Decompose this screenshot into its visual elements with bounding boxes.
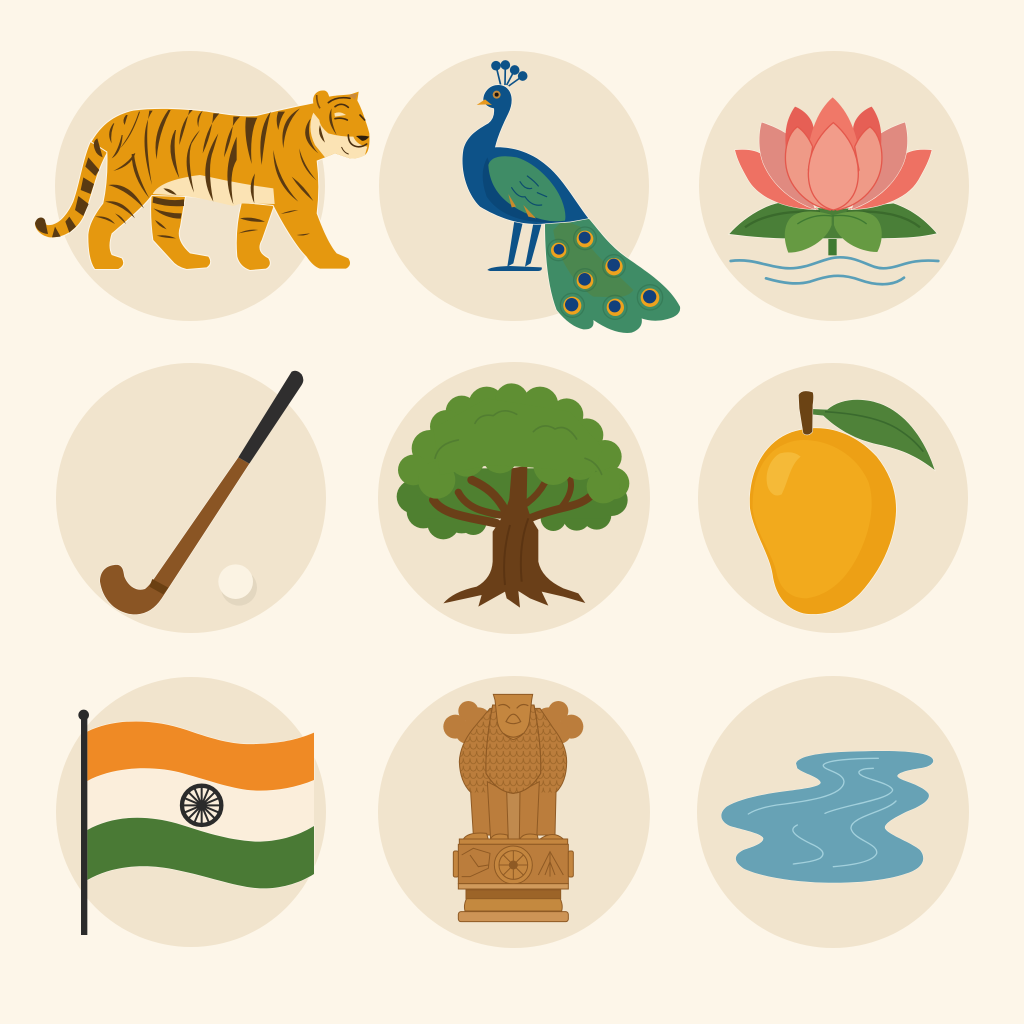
stem bbox=[828, 223, 837, 255]
icon: banyan tree bbox=[397, 383, 629, 608]
wing feathers bbox=[512, 176, 547, 205]
stripes bbox=[35, 108, 337, 238]
panel: hockey stick bbox=[56, 363, 326, 633]
backdrop circle: hockey bbox=[56, 363, 326, 633]
second petals bbox=[759, 122, 907, 209]
icon: lion capital bbox=[443, 694, 583, 922]
base bbox=[458, 884, 568, 889]
leaf bbox=[812, 400, 935, 470]
panel: lotus bbox=[699, 51, 969, 321]
icon: hockey stick bbox=[100, 371, 303, 614]
wing shadow bbox=[483, 157, 563, 222]
wing bbox=[488, 156, 565, 221]
backdrop circle: tree bbox=[378, 362, 650, 634]
backdrop circle: tiger bbox=[55, 51, 325, 321]
panel: peacock bbox=[379, 51, 680, 333]
legs and feet bbox=[487, 217, 542, 271]
abacus reliefs bbox=[462, 848, 490, 877]
icon: lotus bbox=[729, 97, 938, 284]
fruit shine bbox=[767, 452, 801, 495]
backdrop circle: emblem bbox=[378, 676, 650, 948]
backdrop circle: mango bbox=[698, 363, 968, 633]
icon: mango bbox=[750, 391, 935, 614]
branches bbox=[433, 478, 590, 523]
paws bbox=[463, 833, 563, 840]
panel: mango bbox=[698, 363, 968, 633]
green band bbox=[87, 818, 314, 888]
panel: river bbox=[697, 676, 969, 948]
cheek bbox=[310, 113, 367, 159]
icon: ball bbox=[218, 564, 257, 606]
icon: flag bbox=[78, 710, 314, 935]
water waves bbox=[731, 257, 938, 284]
ears and face bbox=[317, 95, 320, 108]
water streaks bbox=[748, 758, 896, 867]
icon: peacock bbox=[462, 61, 680, 333]
centre lion legs bbox=[487, 782, 508, 840]
water body bbox=[721, 751, 933, 883]
tail shading bbox=[553, 220, 633, 297]
centre post bbox=[507, 788, 519, 842]
side lion heads bbox=[443, 701, 583, 743]
side lions bbox=[459, 708, 567, 835]
abacus bbox=[459, 839, 568, 844]
backdrop circle: flag bbox=[56, 677, 326, 947]
beak bbox=[477, 99, 492, 105]
panel: state emblem bbox=[378, 676, 650, 948]
back petals bbox=[785, 107, 881, 157]
top petal bbox=[807, 97, 859, 153]
crest bbox=[492, 61, 527, 86]
panel: flag bbox=[56, 677, 326, 947]
icon: tiger bbox=[35, 90, 369, 270]
mango fruit bbox=[750, 428, 896, 614]
centre lion face bbox=[493, 694, 533, 740]
panel: banyan tree bbox=[378, 362, 650, 634]
inner side petals bbox=[785, 127, 882, 210]
centre petal bbox=[808, 123, 858, 210]
back leaves bbox=[729, 203, 937, 238]
dharma wheel bbox=[494, 846, 532, 884]
backdrop circle: lotus bbox=[699, 51, 969, 321]
backdrop circle: peacock bbox=[379, 51, 649, 321]
eye bbox=[493, 91, 501, 99]
body, neck and head bbox=[462, 85, 588, 224]
tail eyes bbox=[548, 227, 663, 319]
stick band bbox=[149, 579, 168, 594]
belly bbox=[153, 175, 275, 206]
fruit highlight area bbox=[753, 440, 872, 598]
front leaves bbox=[785, 211, 832, 253]
panel: tiger bbox=[35, 51, 369, 321]
front foliage bbox=[398, 383, 629, 503]
icon: river bbox=[721, 751, 933, 883]
rear foliage bbox=[397, 468, 628, 539]
saffron band bbox=[87, 721, 314, 791]
backdrop circle: river bbox=[697, 676, 969, 948]
trunk shading bbox=[504, 518, 528, 585]
outer petals bbox=[735, 150, 932, 209]
stem bbox=[799, 391, 813, 435]
foliage detail bbox=[435, 411, 602, 474]
tail bbox=[545, 207, 680, 333]
centre mane bbox=[486, 705, 541, 793]
ashoka chakra bbox=[182, 786, 221, 825]
grip bbox=[238, 371, 303, 464]
flag pole bbox=[78, 710, 89, 935]
trunk and roots bbox=[443, 466, 585, 608]
stick blade and shaft bbox=[100, 457, 249, 614]
white band bbox=[87, 768, 314, 842]
